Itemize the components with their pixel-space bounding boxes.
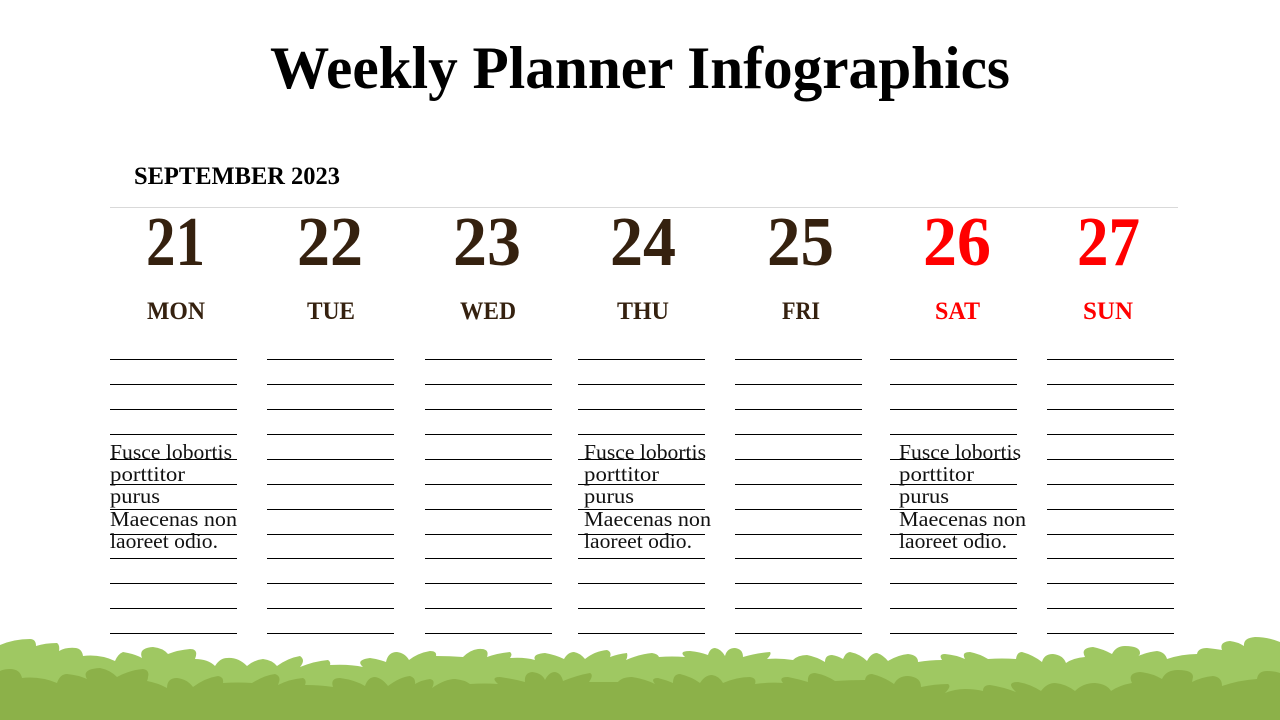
ruled lines — [425, 360, 552, 634]
note text: purus — [899, 484, 949, 508]
note text: purus — [110, 484, 160, 508]
ruled lines — [578, 360, 705, 634]
note text: laoreet odio. — [584, 529, 692, 553]
date number 26: 26 — [923, 204, 991, 281]
note text: laoreet odio. — [899, 529, 1007, 553]
note text: Maecenas non — [584, 507, 712, 531]
weekday SUN: SUN — [1083, 298, 1133, 325]
ruled lines — [110, 360, 237, 634]
date number 27: 27 — [1077, 204, 1140, 281]
note text: laoreet odio. — [110, 529, 218, 553]
weekday FRI: FRI — [782, 298, 820, 325]
note text: Fusce lobortis — [899, 440, 1021, 464]
note text: porttitor — [584, 462, 659, 486]
date number 22: 22 — [297, 204, 363, 281]
panel: Tuesday column — [267, 204, 394, 634]
note text: purus — [584, 484, 634, 508]
panel: Wednesday column — [425, 204, 552, 634]
weekday TUE: TUE — [307, 298, 355, 325]
ruled lines — [1047, 360, 1174, 634]
panel: Saturday column — [890, 204, 1027, 634]
ruled lines — [735, 360, 862, 634]
title: Weekly Planner Infographics — [270, 35, 1010, 101]
month heading: SEPTEMBER 2023 — [134, 163, 340, 190]
note text — [110, 440, 238, 553]
panel: Monday column — [110, 204, 238, 634]
date number 23: 23 — [453, 204, 521, 281]
panel: Sunday column — [1047, 204, 1174, 634]
weekday WED: WED — [460, 298, 516, 325]
weekday SAT: SAT — [935, 298, 980, 325]
note text — [584, 440, 712, 553]
note text: Fusce lobortis — [110, 440, 232, 464]
panel: Friday column — [735, 204, 862, 634]
note text: porttitor — [899, 462, 974, 486]
note text — [899, 440, 1027, 553]
date number 25: 25 — [767, 204, 834, 281]
front grass layer — [0, 668, 1280, 720]
weekday THU: THU — [617, 298, 669, 325]
note text: Fusce lobortis — [584, 440, 706, 464]
note text: Maecenas non — [899, 507, 1027, 531]
note text: porttitor — [110, 462, 185, 486]
date number 24: 24 — [610, 204, 676, 281]
ruled lines — [890, 360, 1017, 634]
weekday MON: MON — [147, 298, 205, 325]
back grass layer — [0, 637, 1280, 720]
panel: Thursday column — [578, 204, 712, 634]
date number 21: 21 — [146, 204, 205, 281]
illustration: grass border — [0, 637, 1280, 720]
ruled lines — [267, 360, 394, 634]
note text: Maecenas non — [110, 507, 238, 531]
